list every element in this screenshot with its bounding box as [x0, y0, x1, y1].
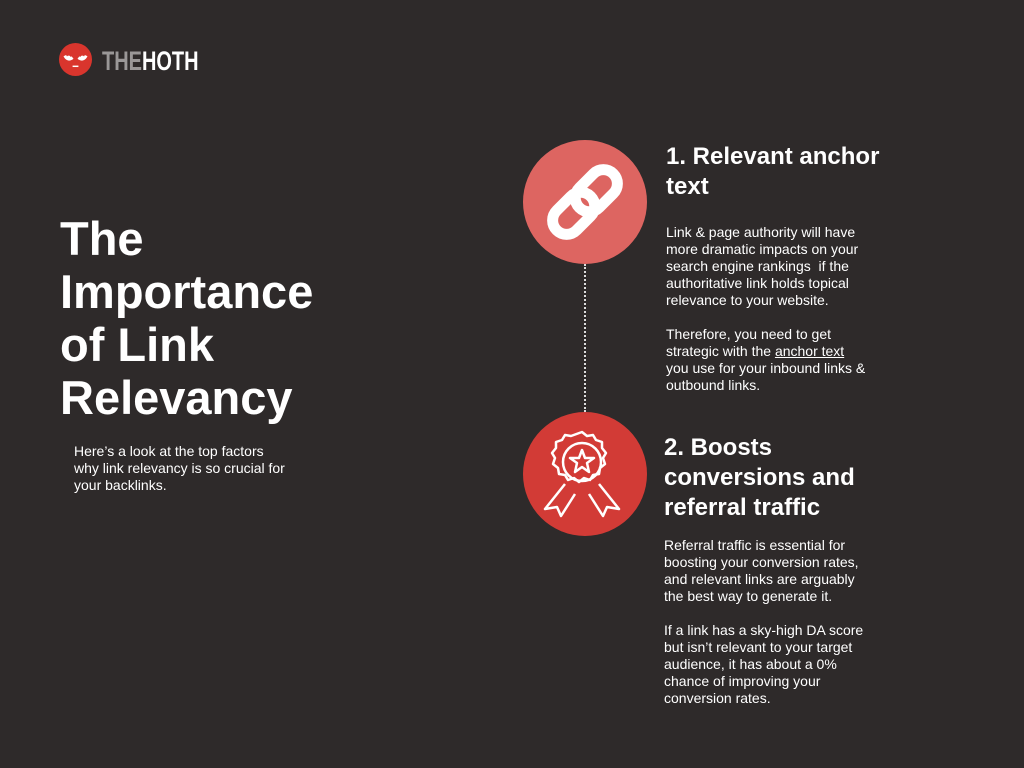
- logo: [59, 43, 199, 76]
- body 2: the best way to generate it.: [664, 588, 832, 604]
- icon: award circle: [523, 412, 647, 536]
- body 1: relevance to your website.: [666, 292, 829, 308]
- body 2: conversion rates.: [664, 690, 771, 706]
- body 1: Therefore, you need to get: [666, 326, 831, 342]
- heading 1: 1. Relevant anchor text: [666, 143, 879, 200]
- body 2: chance of improving your: [664, 673, 820, 689]
- intro text: why link relevancy is so crucial for: [74, 460, 285, 476]
- icon: hoth face: [59, 43, 92, 76]
- body 1: [666, 224, 865, 393]
- body 1: search engine rankings if the: [666, 258, 849, 274]
- body 1: strategic with the anchor text: [666, 343, 844, 359]
- logo text: THEHOTH: [102, 46, 199, 76]
- body 1: more dramatic impacts on your: [666, 241, 858, 257]
- intro text: your backlinks.: [74, 477, 167, 493]
- body 2: [664, 537, 863, 706]
- intro text: Here’s a look at the top factors: [74, 443, 264, 459]
- body 1: outbound links.: [666, 377, 760, 393]
- dotted connector: [584, 264, 586, 412]
- body 1: authoritative link holds topical: [666, 275, 849, 291]
- body 1: you use for your inbound links &: [666, 360, 865, 376]
- body 2: and relevant links are arguably: [664, 571, 855, 587]
- body 2: If a link has a sky-high DA score: [664, 622, 863, 638]
- body 1: Link & page authority will have: [666, 224, 855, 240]
- heading 2: 2. Boosts conversions and referral traffic: [664, 434, 855, 521]
- section 2: [664, 434, 863, 706]
- body 2: Referral traffic is essential for: [664, 537, 845, 553]
- title: The Importance of Link Relevancy: [60, 212, 313, 424]
- icon: link circle: [523, 140, 647, 264]
- intro text: [74, 443, 285, 493]
- body 2: but isn’t relevant to your target: [664, 639, 852, 655]
- section 1: [666, 143, 880, 393]
- body 2: boosting your conversion rates,: [664, 554, 859, 570]
- body 2: audience, it has about a 0%: [664, 656, 837, 672]
